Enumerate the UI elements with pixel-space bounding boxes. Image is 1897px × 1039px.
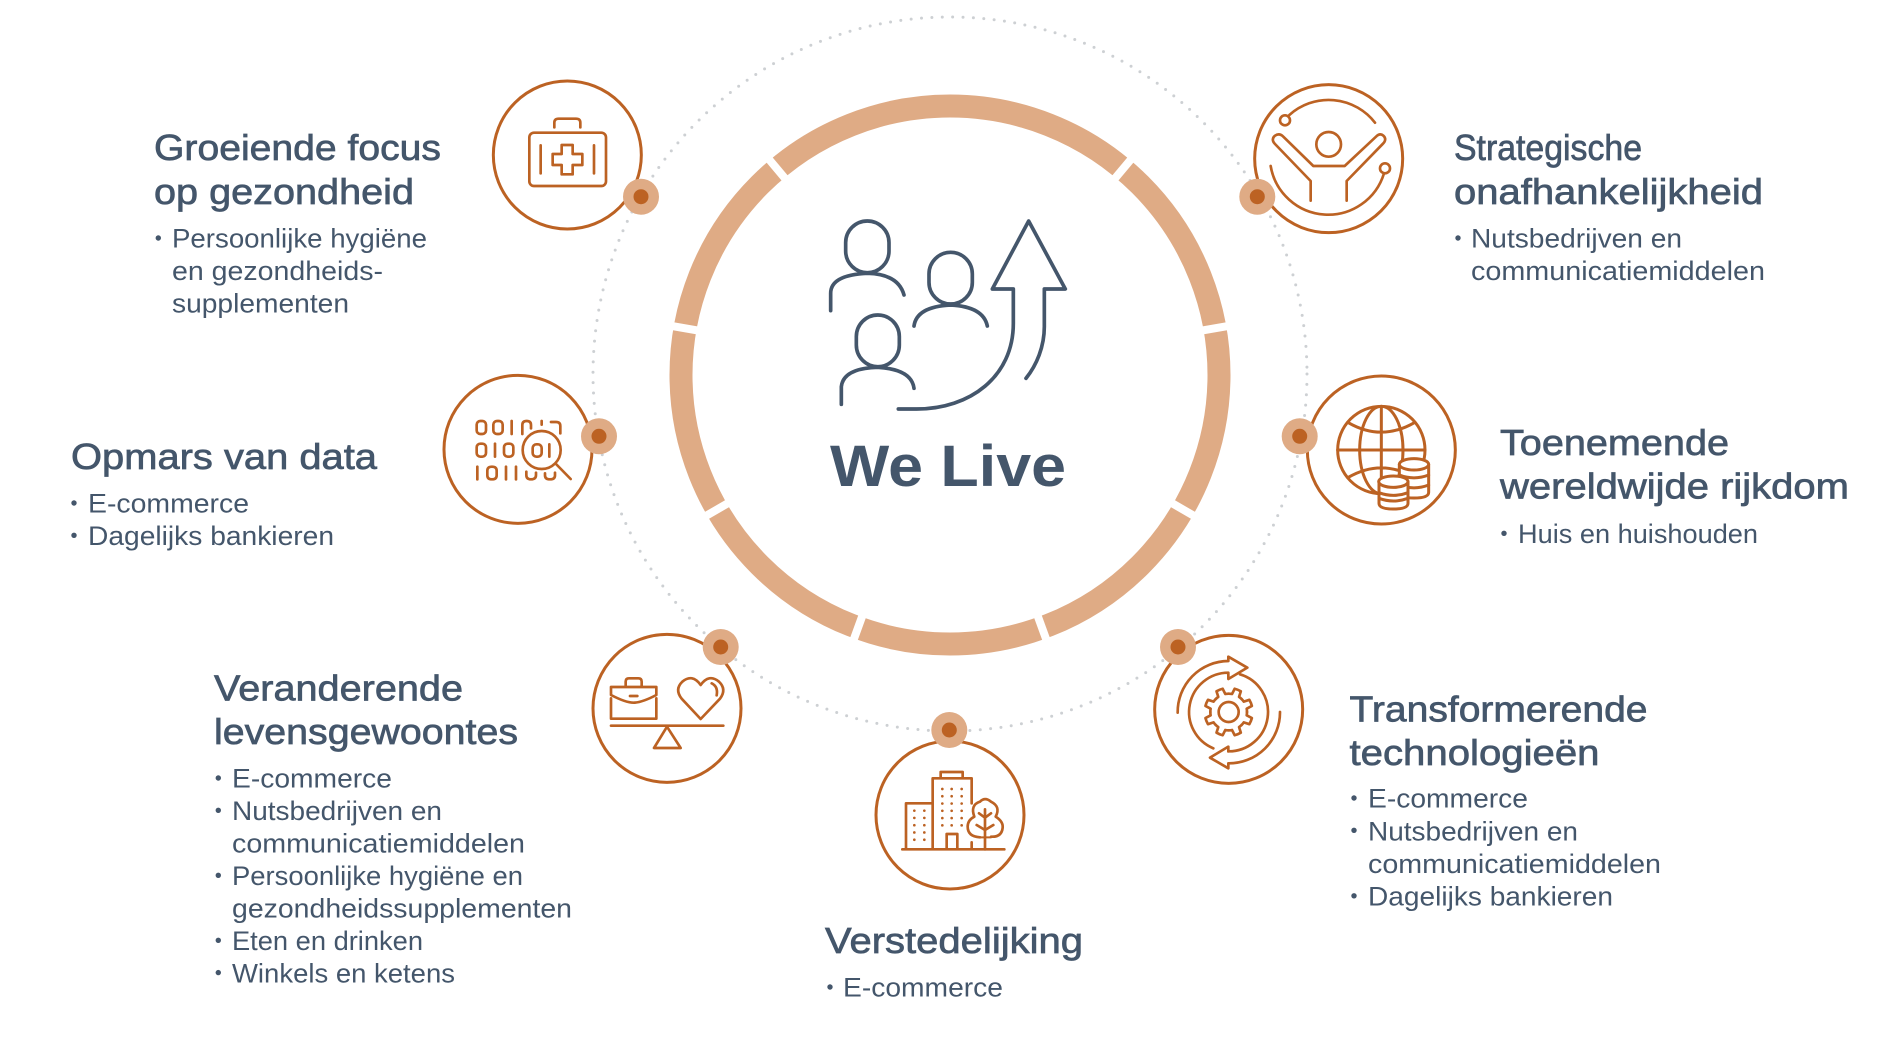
bullet list <box>1351 784 1661 912</box>
heading: Toenemende <box>1500 422 1729 463</box>
title: We Live <box>830 434 1066 499</box>
bullet list: Dagelijks bankieren <box>1368 882 1613 912</box>
timeline node <box>1282 418 1318 454</box>
bullet list <box>156 224 427 319</box>
icon: binary data with magnifier <box>444 375 592 523</box>
bullet list: Nutsbedrijven en <box>1368 816 1578 846</box>
bullet list: Eten en drinken <box>232 926 423 956</box>
bullet list: en gezondheids- <box>172 256 383 286</box>
icon: globe with coins <box>1307 376 1455 524</box>
heading <box>154 127 441 212</box>
panel: Verstedelijking <box>825 712 1083 1002</box>
timeline node <box>703 629 739 665</box>
bullet list: Winkels en ketens <box>232 958 455 988</box>
heading <box>1454 127 1763 212</box>
bullet list: communicatiemiddelen <box>232 829 525 859</box>
bullet list: communicatiemiddelen <box>1471 256 1765 286</box>
timeline node <box>1239 179 1275 215</box>
icon: person with raised arms <box>1255 85 1403 233</box>
icon: first aid kit <box>493 81 641 229</box>
bullet list: gezondheidssupplementen <box>232 894 572 924</box>
panel: Strategische onafhankelijkheid <box>1239 85 1765 286</box>
bullet list: Huis en huishouden <box>1518 519 1758 549</box>
heading: Veranderende <box>214 668 463 708</box>
heading: Strategische <box>1454 127 1642 168</box>
bullet list: Dagelijks bankieren <box>88 521 334 551</box>
icon: people with rising arrow <box>831 221 1065 409</box>
bullet list: Persoonlijke hygiëne en <box>232 861 523 891</box>
heading: Groeiende focus <box>154 127 441 168</box>
bullet list: Nutsbedrijven en <box>232 796 442 826</box>
bullet list: E-commerce <box>232 764 392 794</box>
heading: onafhankelijkheid <box>1454 171 1763 212</box>
bullet list: communicatiemiddelen <box>1368 849 1661 879</box>
heading <box>1350 689 1648 773</box>
bullet list: E-commerce <box>843 972 1003 1002</box>
bullet list <box>1455 224 1765 286</box>
bullet list <box>71 489 334 551</box>
heading: wereldwijde rijkdom <box>1499 466 1849 506</box>
heading: levensgewoontes <box>214 711 518 752</box>
heading: Opmars van data <box>71 436 378 477</box>
bullet list: supplementen <box>172 289 349 319</box>
bullet list <box>216 764 572 988</box>
heading <box>214 668 518 752</box>
bullet list: E-commerce <box>1368 784 1528 814</box>
icon: gear with rotating arrows <box>1155 635 1303 783</box>
heading: technologieën <box>1350 732 1600 773</box>
central segmented ring <box>669 106 1231 644</box>
panel: Toenemende wereldwijde rijkdom <box>1282 376 1849 549</box>
bullet list: Nutsbedrijven en <box>1471 224 1682 254</box>
bullet list: Persoonlijke hygiëne <box>172 224 427 254</box>
timeline node <box>931 712 967 748</box>
heading <box>1499 422 1849 506</box>
heading: Transformerende <box>1350 689 1648 730</box>
heading: Verstedelijking <box>825 920 1083 961</box>
timeline node <box>1160 629 1196 665</box>
panel: Veranderende levensgewoontes <box>214 629 741 988</box>
timeline node <box>581 418 617 454</box>
icon: work life balance scale <box>593 634 741 782</box>
bullet list: E-commerce <box>88 489 249 519</box>
timeline node <box>623 179 659 215</box>
heading: op gezondheid <box>154 171 414 212</box>
panel: Transformerende technologieën <box>1155 629 1661 912</box>
icon: city buildings and tree <box>876 741 1024 889</box>
panel: Opmars van data <box>71 375 617 551</box>
panel: Groeiende focus op gezondheid <box>154 81 659 319</box>
